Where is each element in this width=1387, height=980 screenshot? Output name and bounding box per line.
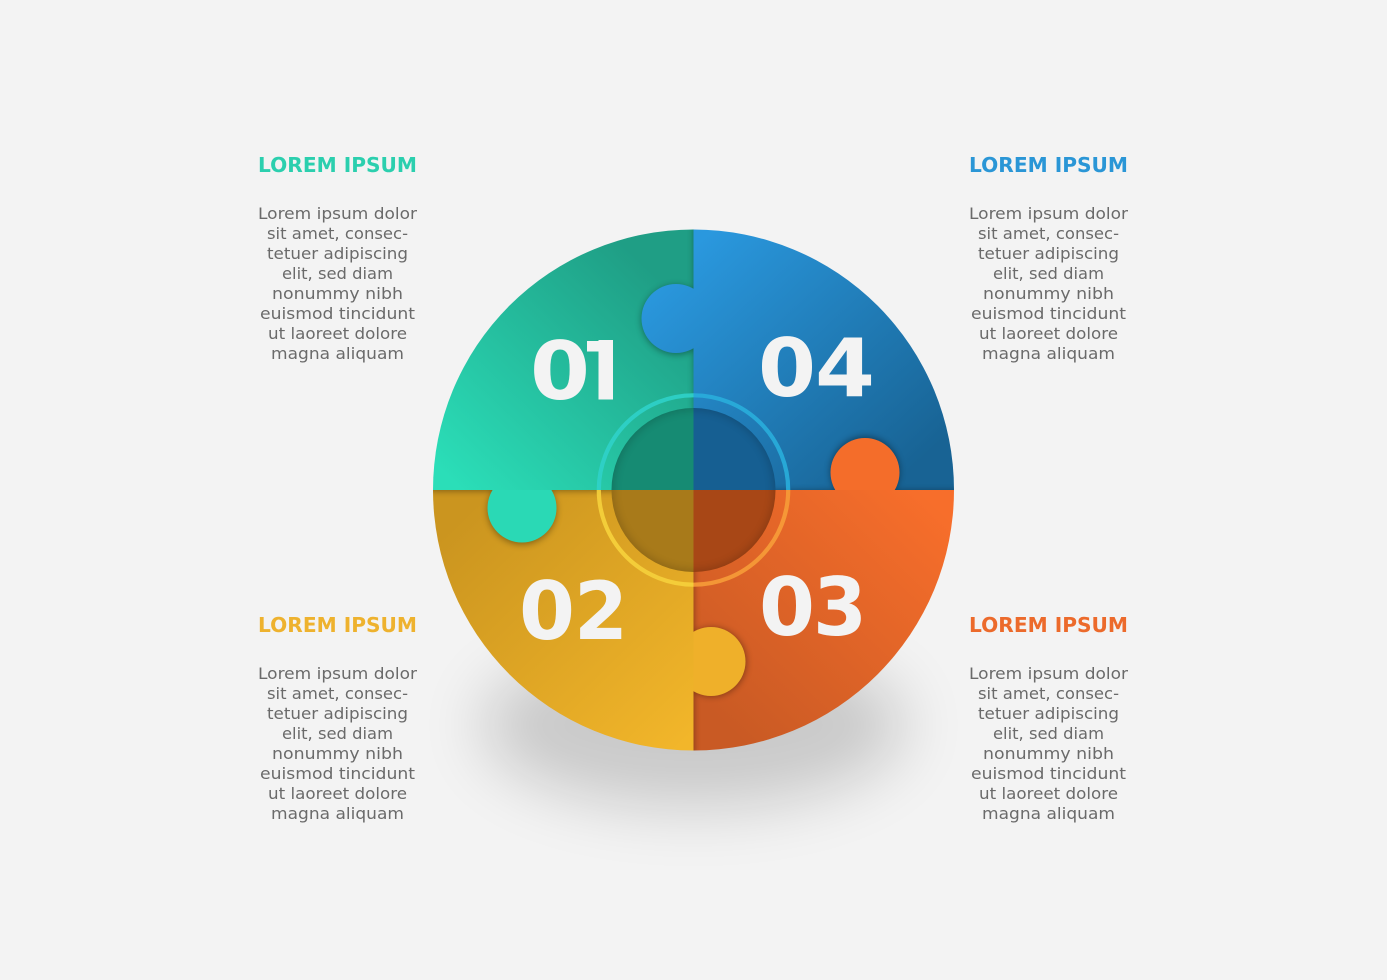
body 04: [969, 204, 1128, 363]
body 02: sit amet, consec-: [267, 684, 408, 703]
body 04: Lorem ipsum dolor: [969, 204, 1128, 223]
body 02: ut laoreet dolore: [268, 784, 407, 803]
text block 04: [969, 153, 1128, 363]
piece 02 yellow: [433, 490, 694, 750]
number 01: [534, 339, 613, 400]
number 03: 0: [759, 561, 815, 654]
body 02: euismod tincidunt: [260, 764, 415, 783]
puzzle circle: [430, 225, 960, 756]
number 02: 0: [519, 565, 575, 658]
number 04: 4: [815, 322, 875, 415]
body 01: elit, sed diam: [282, 264, 393, 283]
body 03: ut laoreet dolore: [979, 784, 1118, 803]
number 03: 3: [813, 561, 867, 654]
body 04: euismod tincidunt: [971, 304, 1126, 323]
heading 01: LOREM IPSUM: [258, 153, 417, 177]
text block 01: [258, 153, 417, 363]
knob: yellow: [694, 627, 746, 696]
body 02: nonummy nibh: [272, 744, 403, 763]
number 04: 0: [758, 322, 816, 415]
body 01: euismod tincidunt: [260, 304, 415, 323]
body 02: [258, 664, 417, 823]
piece 01 teal: [433, 230, 694, 490]
body 02: magna aliquam: [271, 804, 404, 823]
ring: [599, 395, 788, 585]
body 03: elit, sed diam: [993, 724, 1104, 743]
number 04: [758, 322, 875, 415]
knob: teal: [488, 490, 556, 542]
piece 04 blue: [694, 230, 954, 490]
body 03: magna aliquam: [982, 804, 1115, 823]
body 03: nonummy nibh: [983, 744, 1114, 763]
body 04: magna aliquam: [982, 344, 1115, 363]
body 04: tetuer adipiscing: [978, 244, 1119, 263]
heading 02: LOREM IPSUM: [258, 613, 417, 637]
body 03: Lorem ipsum dolor: [969, 664, 1128, 683]
number 02: [519, 565, 628, 658]
body 03: euismod tincidunt: [971, 764, 1126, 783]
body 02: Lorem ipsum dolor: [258, 664, 417, 683]
body 01: nonummy nibh: [272, 284, 403, 303]
piece 03 orange: [694, 490, 954, 750]
body 04: sit amet, consec-: [978, 224, 1119, 243]
knob: orange: [830, 438, 900, 490]
body 03: tetuer adipiscing: [978, 704, 1119, 723]
body 01: [258, 204, 417, 363]
body 01: ut laoreet dolore: [268, 324, 407, 343]
heading 04: LOREM IPSUM: [969, 153, 1128, 177]
number 01: 1: [570, 322, 636, 418]
center circle: [608, 405, 778, 575]
body 01: sit amet, consec-: [267, 224, 408, 243]
body 01: magna aliquam: [271, 344, 404, 363]
body 04: elit, sed diam: [993, 264, 1104, 283]
text block 03: [969, 613, 1128, 823]
number 01: 0: [530, 325, 590, 418]
body 04: nonummy nibh: [983, 284, 1114, 303]
body 03: sit amet, consec-: [978, 684, 1119, 703]
number 02: 2: [574, 565, 628, 658]
body 02: tetuer adipiscing: [267, 704, 408, 723]
heading 03: LOREM IPSUM: [969, 613, 1128, 637]
body 01: Lorem ipsum dolor: [258, 204, 417, 223]
number 03: [759, 561, 867, 654]
body 03: [969, 664, 1128, 823]
body 04: ut laoreet dolore: [979, 324, 1118, 343]
body 02: elit, sed diam: [282, 724, 393, 743]
drop shadow under circle: [482, 643, 906, 807]
knob: blue: [642, 284, 694, 353]
body 01: tetuer adipiscing: [267, 244, 408, 263]
text block 02: [258, 613, 417, 823]
